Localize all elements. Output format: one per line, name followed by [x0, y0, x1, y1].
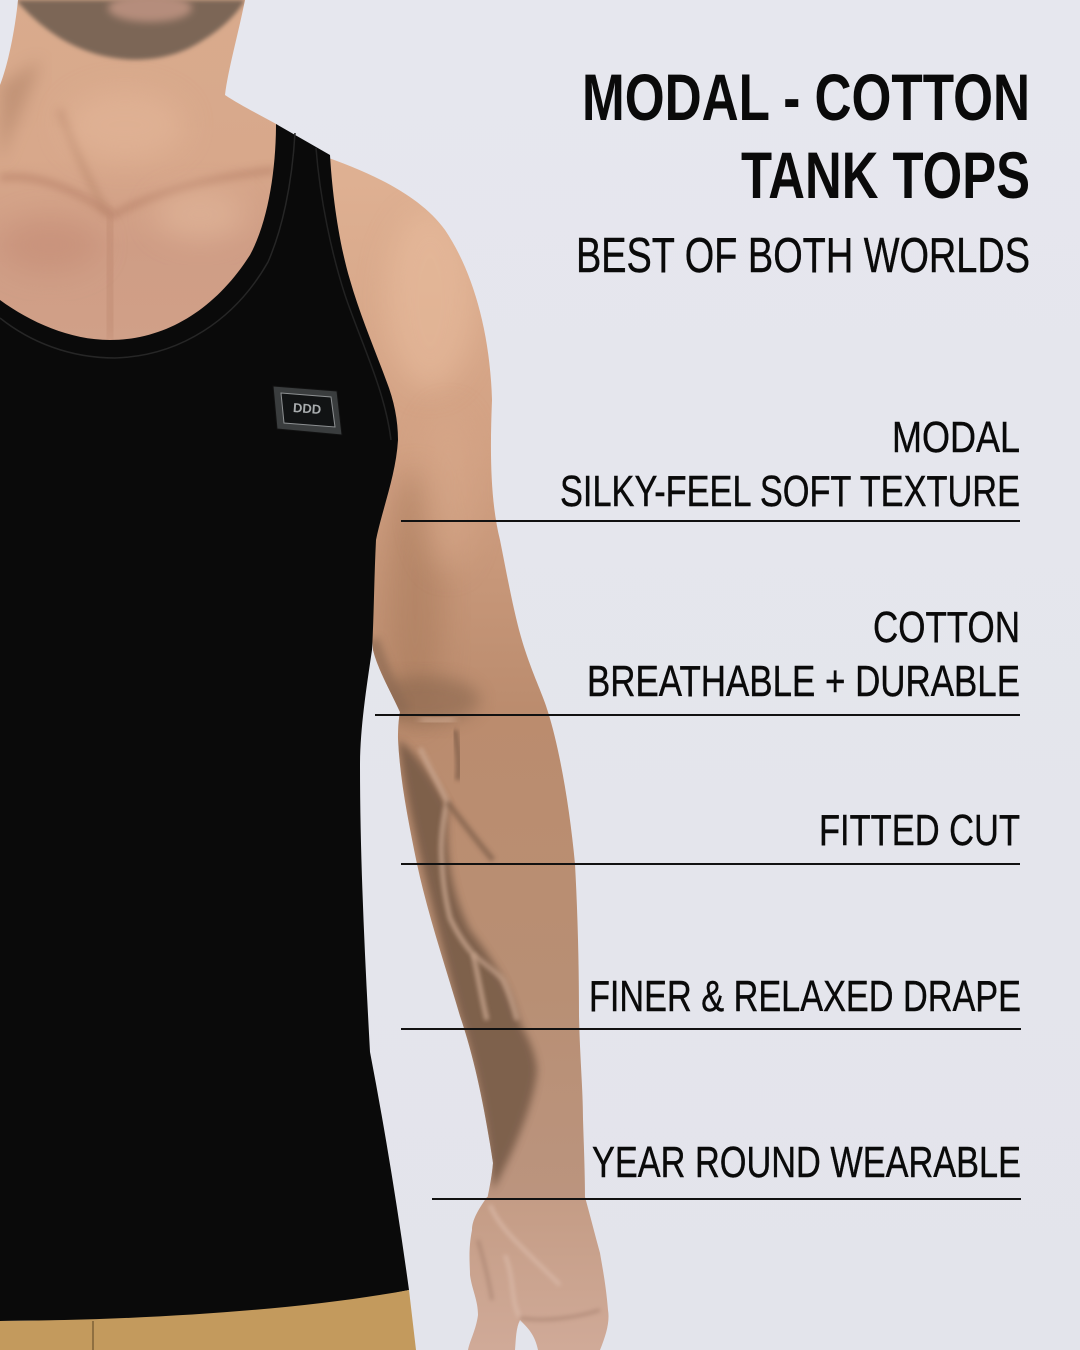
black tank top — [0, 124, 409, 1321]
armhole seam — [316, 148, 391, 440]
model figure photo illustration — [0, 0, 609, 1350]
title — [582, 60, 1030, 212]
chest badge: DDD — [293, 400, 322, 417]
feature: cotton: COTTON — [873, 603, 1020, 652]
forearm veins — [420, 748, 487, 1020]
forearm shadow — [398, 740, 537, 1190]
feature: modal — [401, 413, 1020, 522]
chest badge — [273, 386, 342, 435]
tan trousers — [0, 1290, 416, 1350]
neck and chest skin — [0, 0, 300, 350]
arm — [330, 158, 585, 1198]
garment body — [0, 124, 409, 1321]
arm shading — [386, 477, 444, 678]
feature: cotton — [375, 603, 1020, 716]
feature: fitted cut: FITTED CUT — [819, 806, 1020, 855]
beard — [16, 0, 245, 60]
neckline seam — [0, 133, 295, 358]
hand — [468, 1197, 609, 1350]
feature: modal: MODAL — [892, 413, 1020, 462]
